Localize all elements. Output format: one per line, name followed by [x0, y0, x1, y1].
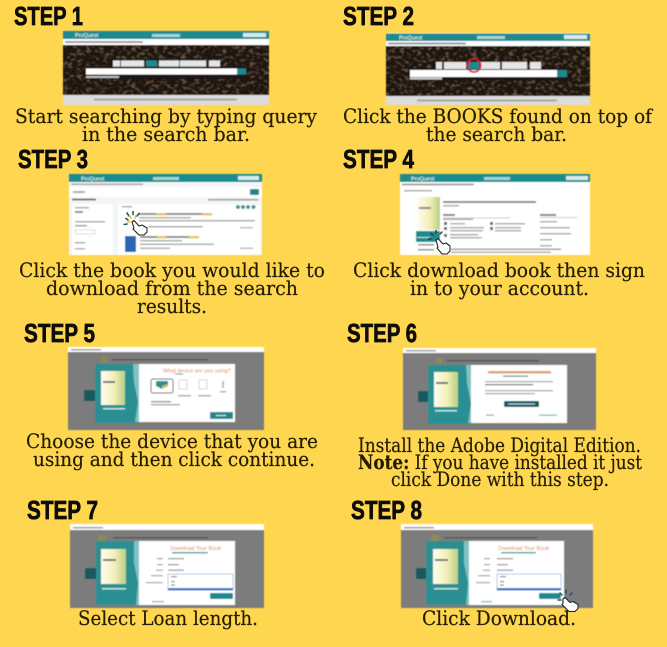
screenshot: BOOKS tab circled: ProQuest [399, 36, 423, 42]
panel: step 1 [14, 3, 317, 146]
panel: step 7 [27, 497, 264, 630]
heading: step 1: STEP 1 [14, 3, 83, 31]
caption: step 4 [353, 259, 645, 300]
screenshot: download button: Download Your Book [498, 546, 549, 552]
panel: step 8 [351, 497, 593, 630]
panel: step 5 [24, 320, 318, 471]
heading: step 3: STEP 3 [18, 146, 88, 174]
screenshot: search results: ProQuest [81, 176, 105, 182]
screenshot: Adobe Digital Edition dialog [403, 348, 596, 430]
caption: step 4: Click download book then sign [353, 259, 645, 282]
caption: step 1: Start searching by typing query [15, 105, 317, 128]
panel: step 4 [343, 146, 645, 300]
screenshot: BOOKS tab circled [386, 33, 590, 105]
caption: step 5 [26, 430, 318, 471]
screenshot: ProQuest search page [63, 31, 269, 105]
caption: step 2: the search bar. [426, 123, 567, 146]
heading: step 4: STEP 4 [343, 146, 415, 174]
caption: step 6: click Done with this step. [391, 468, 609, 491]
caption: step 4: in to your account. [410, 277, 589, 300]
panel: step 6 [347, 320, 642, 491]
icon: pointing hand with click burst [124, 212, 147, 235]
screenshot: download button [401, 524, 593, 608]
caption: step 3: results. [137, 295, 207, 318]
caption: step 3 [19, 259, 325, 318]
caption: step 3: Click the book you would like to [19, 259, 325, 282]
panel: step 3 [18, 146, 325, 318]
screenshot: ProQuest search page: ProQuest [75, 33, 99, 39]
screenshot: device selection dialog: What device are you using? [163, 368, 231, 374]
caption: step 1: in the search bar. [82, 123, 250, 146]
screenshot: book details page [400, 174, 590, 255]
heading: step 5: STEP 5 [24, 320, 95, 348]
caption: step 5: Choose the device that you are [26, 430, 318, 453]
caption: step 7: Select Loan length. [78, 607, 258, 630]
caption: step 6 [358, 434, 642, 491]
caption: step 3: download from the search [46, 277, 298, 300]
heading: step 6: STEP 6 [347, 320, 417, 348]
screenshot: book details page: ProQuest [411, 176, 435, 182]
screenshot: device selection dialog [68, 347, 264, 430]
heading: step 7: STEP 7 [27, 497, 98, 525]
icon: pointing hand on download button [428, 230, 450, 254]
screenshot: search results [69, 174, 262, 255]
screenshot: loan length dropdown: Download Your Book [170, 546, 221, 552]
icon: pointing hand on download [558, 590, 578, 612]
caption: step 2 [343, 105, 654, 146]
heading: step 2: STEP 2 [343, 3, 414, 31]
screenshot: loan length dropdown [70, 524, 264, 608]
caption: step 8: Click Download. [422, 607, 576, 630]
caption: step 5: using and then click continue. [33, 448, 315, 471]
caption: step 2: Click the BOOKS found on top of [343, 105, 654, 128]
panel: step 2 [343, 3, 654, 146]
caption: step 1 [15, 105, 317, 146]
heading: step 8: STEP 8 [351, 497, 422, 525]
